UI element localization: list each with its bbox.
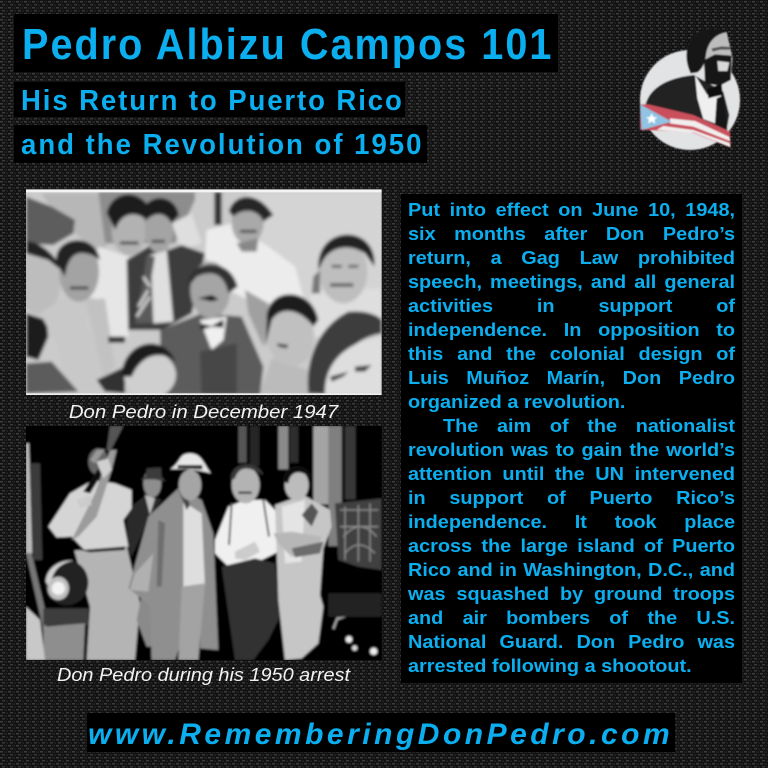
- body text: Luis Muñoz Marín, Don Pedro: [408, 367, 735, 388]
- body text: independence. In opposition to: [408, 319, 735, 340]
- photo: Don Pedro during his 1950 arrest: [26, 426, 382, 660]
- body text: Rico and in Washington, D.C., and: [408, 559, 735, 580]
- caption: Don Pedro in December 1947: Don Pedro in December 1947: [69, 401, 338, 422]
- body text: independence. It took place: [408, 511, 735, 532]
- photo: Don Pedro in December 1947: [26, 189, 382, 395]
- body text: across the large island of Puerto: [408, 535, 735, 556]
- body text: attention until the UN intervened: [408, 463, 735, 484]
- body text: arrested following a shootout.: [408, 655, 692, 676]
- body text: The aim of the nationalist: [443, 415, 735, 436]
- subtitle line two: and the Revolution of 1950: [21, 129, 423, 161]
- body text: Put into effect on June 10, 1948,: [408, 199, 735, 220]
- body text: revolution was to gain the world’s: [408, 439, 735, 460]
- body text: six months after Don Pedro’s: [408, 223, 735, 244]
- title: Pedro Albizu Campos 101: [22, 20, 553, 69]
- body text: National Guard. Don Pedro was: [408, 631, 735, 652]
- body text: in support of Puerto Rico’s: [408, 487, 735, 508]
- caption: Don Pedro during his 1950 arrest: Don Pedro during his 1950 arrest: [57, 664, 350, 685]
- body text: return, a Gag Law prohibited: [408, 247, 735, 268]
- body text: [408, 199, 736, 676]
- body text: activities in support of: [408, 295, 735, 316]
- text panel: the Gag Law and the revolution: [401, 194, 742, 683]
- subtitle line one: His Return to Puerto Rico: [21, 85, 404, 117]
- body text: speech, meetings, and all general: [408, 271, 735, 292]
- body text: organized a revolution.: [408, 391, 625, 412]
- body text: was squashed by ground troops: [408, 583, 735, 604]
- body text: this and the colonial design of: [408, 343, 735, 364]
- body text: and air bombers of the U.S.: [408, 607, 735, 628]
- website link: www.RememberingDonPedro.com: [88, 718, 673, 751]
- icon: Don Pedro portrait with Puerto Rican flag: [639, 28, 741, 151]
